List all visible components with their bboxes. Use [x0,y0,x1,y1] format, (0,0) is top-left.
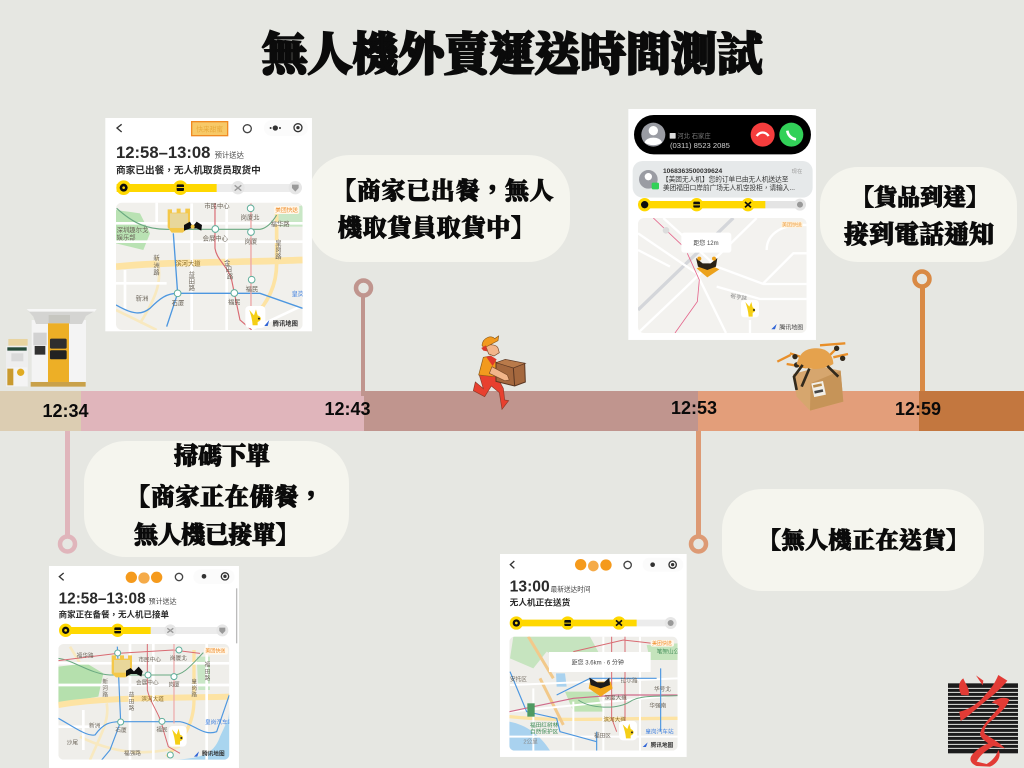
map: 市民中心 [138,656,161,664]
connector: 12:53 [691,431,706,552]
screenshot: merchant dispatched: 预计送达 [215,151,245,160]
map: 福田红树林 [530,721,559,729]
map [638,218,807,333]
progress bar [59,624,228,637]
SMS notification [633,161,813,198]
incoming call pill: (0311) 8523 2085 [670,141,730,150]
status text: 商家正在备餐，无人机已接单 [59,610,169,620]
callout: order placed: 無人機已接單】 [134,521,299,549]
map: 安托区 [510,675,527,683]
callout: goods arrived: 接到電話通知 [844,220,994,249]
map: 路 [191,691,197,699]
map attribution [642,742,673,748]
map: 市民中心 [204,201,230,210]
app header controls [510,558,683,572]
map: 福民 [156,725,168,733]
map attribution [771,324,803,330]
callout: drone delivering: 【無人機正在送貨】 [758,527,970,553]
map: 娱乐部 [117,232,136,241]
icon: vending kiosk [6,309,97,387]
map: 会展中心 [203,233,229,242]
map: 美团快送 [275,206,298,214]
map: 福 [205,661,211,669]
callout: merchant dispatched [308,155,570,262]
callout: merchant dispatched: 機取貨員取貨中】 [338,214,536,242]
distance tooltip [681,233,731,253]
map: 裕亨路 [730,291,748,303]
map: 拉尔路 [621,676,638,684]
distance tooltip: 距您 12m [693,239,719,247]
map: 田 [129,698,135,705]
map: 新洲 [89,721,101,729]
timeline band [0,391,1024,431]
icon: mascot marker [741,300,759,317]
app header controls: 快来甜蜜 [196,125,223,134]
map: 美团快送 [782,221,802,228]
time label 12:34: 12:34 [42,401,89,421]
icon: store marker [112,655,132,677]
progress bar [510,616,677,630]
map: 福民 [228,297,241,306]
callout: merchant dispatched: 【商家已出餐，無人 [332,177,554,205]
icon: drone marker [589,678,613,697]
incoming call pill: 河北 石家庄 [677,131,711,140]
incoming call pill [634,115,811,154]
connector: 12:43 [356,280,371,396]
map attribution: 腾讯地图 [202,750,225,758]
icon: store marker [168,209,190,233]
status text: 无人机正在送货 [510,597,571,608]
icon: mascot marker [169,726,187,747]
screenshot: phone call notification [628,109,816,340]
icon: mascot marker [245,306,265,328]
time label 12:53: 12:53 [671,398,717,418]
icon: drone marker [126,667,143,677]
map attribution: 腾讯地图 [651,741,674,749]
callout: order placed [84,441,349,557]
illustration: delivery drone with parcel [777,343,848,411]
map: 田 [189,277,195,285]
map: 美团快送 [652,640,672,647]
map attribution [194,750,224,757]
map: 皇岗 [292,289,304,298]
map: 福民 [246,284,258,293]
SMS notification: 现在 [792,167,802,175]
delivery time: 12:58–13:08 [59,591,146,608]
connector: 12:59 [914,272,930,391]
title: 無人機外賣運送時間測試 [262,29,763,80]
icon: drone marker [696,257,719,277]
scrollbar [236,588,237,643]
map: 路 [129,704,135,712]
map: 石厦 [172,299,184,307]
screenshot: drone delivering [500,554,687,757]
callout: order placed: 掃碼下單 [174,443,270,470]
map: 新 [153,253,160,262]
map [509,637,680,751]
map: 岗厦北 [170,654,187,662]
screenshot: merchant preparing: 预计送达 [149,596,177,605]
map: 岗 [191,685,197,692]
map attribution [264,320,298,326]
callout: order placed: 【商家正在備餐， [126,483,324,511]
screenshot: merchant dispatched [105,118,312,331]
map: 路 [227,271,234,280]
distance tooltip: 距您 3.6km · 6 分钟 [572,658,624,666]
map: 皇 [275,238,282,247]
connector: 12:34 [60,431,75,552]
app header controls [59,569,235,584]
map [116,201,304,330]
illustration: courier running with parcel [473,336,525,409]
app header controls [117,120,308,136]
map: 福田区 [594,732,611,740]
map: 石厦 [115,727,127,734]
map: 自然保护区 [530,728,559,736]
logo: calligraphy over stripes [948,675,1018,767]
map: 路 [102,691,108,699]
map attribution: 腾讯地图 [273,319,298,328]
time label 12:43: 12:43 [324,399,371,419]
map: 滨河大道 [175,259,201,268]
callout: goods arrived [820,167,1017,262]
map: 路 [153,268,160,277]
map: 华强南 [649,702,667,710]
icon: drone marker [184,222,202,231]
map: 滨河大道 [141,695,164,703]
screenshot: drone delivering: 最新送达时间 [551,584,591,593]
SMS notification: 美团福田口岸前广场无人机空投柜，请输入... [663,183,795,192]
map: 沙尾 [67,739,78,746]
map: 皇岗汽车站 [645,728,674,736]
progress bar [116,180,302,195]
map attribution: 腾讯地图 [779,323,803,331]
callout: drone delivering [722,489,984,591]
map: 深圳趣尔戈 [117,225,149,234]
map: 金 [224,258,231,267]
map: 皇 [191,677,197,685]
map: 福华路 [77,652,94,660]
map: 路 [275,251,282,260]
map: 河 [102,684,108,692]
delivery time: 12:58–13:08 [116,143,210,162]
map: 福强路 [124,749,141,757]
map: 深度大道 [604,694,627,702]
map: 益 [189,270,196,279]
callout: goods arrived: 【貨品到達】 [851,184,989,210]
map: 益 [129,691,135,699]
map: 华号北 [654,685,671,693]
map: 田 [226,266,232,274]
map: 洲 [153,262,160,269]
map [58,644,234,760]
map: 路 [205,674,211,682]
map: 新洲 [136,294,148,303]
map: 新 [102,677,108,685]
SMS notification: 1068363500039624 [663,168,723,175]
map: 会展中心 [136,679,159,687]
map: 美团快送 [205,648,225,655]
map: 岗厦 [168,682,180,689]
map: 路 [189,283,196,292]
map: 岗厦北 [241,213,260,221]
map: 岗厦 [245,237,257,245]
icon: mascot marker [619,721,637,740]
screenshot: merchant preparing [49,566,239,768]
delivery time: 13:00 [510,578,550,595]
map: 福华路 [271,219,290,228]
map: 2公里 [523,738,538,745]
status text: 商家已出餐，无人机取货员取货中 [116,164,261,176]
map: 田 [205,668,211,675]
distance tooltip [549,652,651,672]
progress bar [638,198,806,211]
SMS notification: 【美团无人机】您的订单已由无人机送达至 [662,174,789,183]
map: 岗 [275,246,282,254]
time label 12:59: 12:59 [895,399,941,419]
map: 滨河大道 [603,716,626,724]
map: 皇岗汽车站 [205,718,234,726]
map: 笔架山公 [657,647,680,655]
